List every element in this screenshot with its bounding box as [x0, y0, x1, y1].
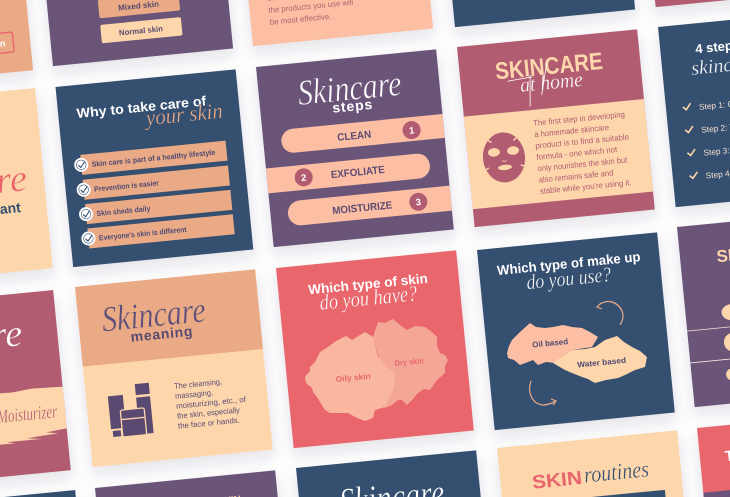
step labels: CLEAN [337, 129, 372, 144]
card: 4 steps skincare [658, 9, 730, 207]
heading: Why to take care of [76, 93, 207, 121]
card: top-left orange panel [0, 0, 33, 88]
list bar 2 [83, 166, 230, 200]
list text: Skin sheds daily [96, 204, 151, 218]
button: mixed skin [98, 0, 180, 18]
step list [699, 95, 730, 181]
step band: exfoliate [266, 153, 431, 193]
label: normal skin: Normal skin [119, 24, 163, 38]
card background [477, 232, 675, 430]
paragraph: massaging, [175, 388, 213, 401]
paragraph: be most effective. [269, 12, 332, 27]
step labels: EXFOLIATE [330, 164, 385, 181]
label: oily skin: Oily skin [335, 372, 371, 384]
heading: SKIN [531, 468, 583, 494]
purple block [703, 475, 730, 497]
card: which type of make up [477, 232, 675, 430]
outlined button [0, 32, 14, 56]
icon: face mask [481, 131, 527, 184]
card: which type of skin [276, 250, 474, 448]
card: bottom navy panel [296, 450, 494, 497]
icon: check 4 [81, 231, 96, 246]
card: bottom-left navy panel [0, 490, 93, 497]
script heading: Skincare [100, 289, 207, 339]
paragraph: formula - one which not [536, 145, 618, 162]
icon: check 3 [78, 206, 94, 222]
blob: oily skin [305, 332, 395, 421]
icon: peach blob 1 [721, 303, 730, 321]
card: top navy panel [437, 0, 635, 27]
paragraph [533, 110, 634, 196]
paragraph: stable while you're using it. [539, 178, 632, 196]
card: right purple panel [677, 209, 730, 407]
list text: Prevention is easier [94, 178, 159, 194]
card: why to take care of your skin [56, 69, 253, 267]
label: water based: Water based [577, 356, 627, 369]
button: normal skin [100, 17, 183, 43]
card: left peach panel [0, 88, 53, 286]
step labels: MOISTURIZE [332, 199, 393, 217]
card: bottom-right coral panel [697, 410, 730, 497]
card: skincare meaning [75, 269, 273, 467]
script subheading: routines [583, 456, 650, 488]
heading: Which type of skin [308, 271, 428, 297]
divider lines [687, 313, 730, 363]
script subheading: at home [519, 67, 584, 97]
card: skin types buttons [35, 0, 233, 66]
heading: Which type of make up [496, 249, 641, 278]
paragraph [174, 375, 249, 431]
paragraph: a homemade skincare [534, 123, 610, 139]
paragraph: the face or hands. [178, 416, 240, 431]
script subheading: do you have? [318, 280, 418, 315]
label: oil based: Oil based [532, 337, 569, 349]
card: top-right rose panel [638, 0, 730, 7]
card: skin routines [497, 430, 695, 497]
badge 3: 3 [415, 197, 422, 209]
list text: Skin care is part of a healthy lifestyle [91, 148, 216, 169]
heading: SKINCARE [494, 48, 604, 85]
arrow: bottom curved [530, 381, 556, 405]
list text: Everyone's skin is different [99, 225, 187, 242]
icon: check 1 [74, 157, 89, 173]
bold subheading: steps [332, 96, 373, 116]
list bar 3 [85, 190, 232, 224]
paragraph: moisturizing, etc., of [176, 395, 247, 411]
icon: peach blob 2 [723, 332, 730, 352]
badge 3 [408, 192, 428, 212]
navy block [591, 490, 668, 497]
paragraph [267, 0, 355, 27]
paragraph: product is to find a suitable [535, 132, 630, 151]
card: bottom purple panel [95, 470, 293, 497]
card: skincare steps [256, 49, 454, 247]
paragraph: The first step in developing [533, 110, 626, 128]
icon: skincare products [107, 383, 154, 438]
list text [91, 148, 223, 242]
badge 2 [294, 168, 314, 187]
badge 1: 1 [409, 125, 416, 137]
card: left rose moisturizer [0, 290, 71, 488]
icon: check 2 [76, 182, 91, 197]
bold subheading: meaning [130, 323, 193, 345]
paragraph: The cleansing, [174, 377, 222, 391]
paragraph: also remains safe and [538, 168, 614, 185]
badge 1 [402, 120, 421, 140]
script subheading: do you use? [525, 262, 613, 294]
blob: oil based [507, 323, 598, 365]
blob: dry skin [373, 319, 448, 408]
brush stroke [0, 386, 68, 457]
badge 2: 2 [301, 173, 307, 184]
vertical script strokes [506, 63, 551, 109]
script subheading: your skin [143, 98, 224, 130]
icon: peach blob 3 [726, 368, 730, 381]
card background [276, 250, 474, 448]
step pill: clean [280, 114, 445, 154]
peach content band [464, 99, 653, 209]
list bar 1 [80, 141, 227, 175]
card: skincare at home [457, 29, 655, 227]
header band [75, 269, 263, 367]
blob: water based [553, 336, 647, 383]
arrow: top curved [597, 301, 623, 325]
step pill: moisturize [287, 186, 452, 227]
icon: check marks [683, 103, 698, 179]
list bar 4 [87, 214, 235, 248]
paragraph: the skin, especially [177, 406, 240, 421]
label: dry skin: Dry skin [394, 356, 424, 368]
card: top peach text panel [235, 0, 433, 46]
script heading: Skincare [296, 63, 403, 113]
step labels [325, 127, 393, 217]
paragraph: only nourishes the skin but [537, 155, 628, 173]
